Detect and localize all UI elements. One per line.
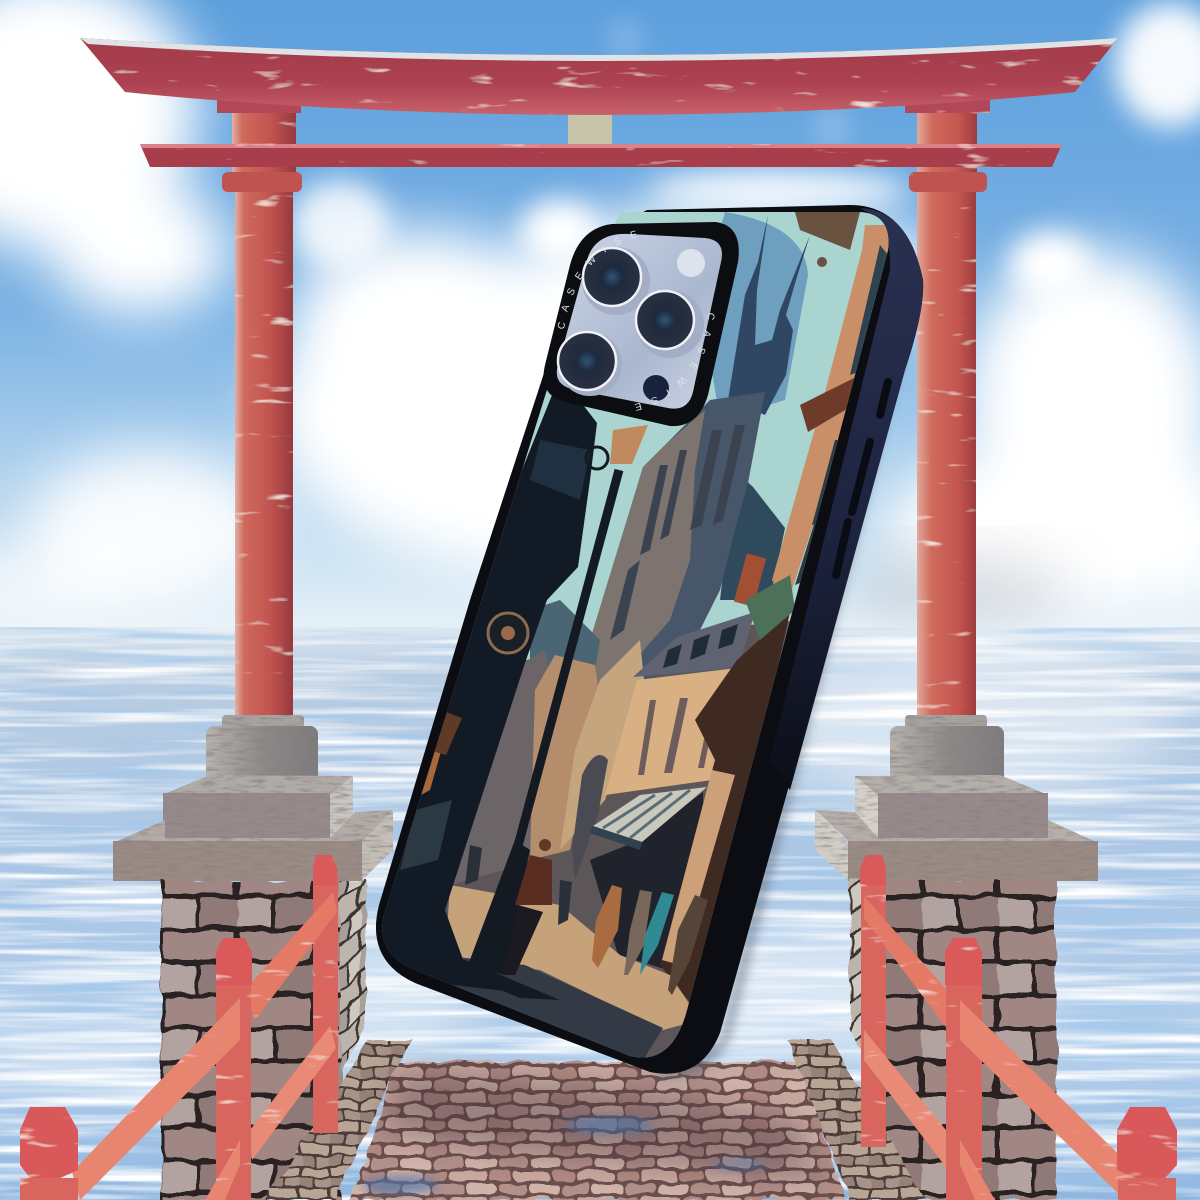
left brick pier	[161, 880, 366, 1200]
phone case	[376, 205, 924, 1074]
lens 1	[582, 247, 650, 315]
street lit	[445, 885, 700, 1030]
camera plate	[557, 234, 722, 409]
right terracotta building	[772, 225, 888, 590]
street shadow	[385, 945, 663, 1065]
side buttons	[836, 382, 888, 575]
cathedral lower front	[560, 640, 645, 850]
sky arc	[712, 212, 808, 404]
right stone base	[815, 715, 1098, 881]
lower scene backing	[380, 620, 800, 1070]
leaves	[795, 212, 860, 267]
phone motion blur	[650, 350, 905, 1078]
distant shaded houses	[454, 650, 548, 884]
cathedral arch windows	[610, 425, 745, 640]
stone walkway	[265, 1040, 925, 1200]
slate roof	[633, 612, 755, 677]
brand text: CASEWISE	[558, 230, 638, 329]
case body	[376, 205, 923, 1074]
lens 2	[636, 290, 704, 358]
camera plateau	[544, 222, 739, 426]
artwork: street scene	[370, 205, 900, 1075]
lamp post	[464, 425, 648, 1000]
mountain	[720, 470, 785, 600]
torii: left pillar	[217, 85, 302, 720]
right railing	[860, 855, 1177, 1200]
sky background	[0, 0, 1200, 630]
portal arch	[572, 755, 608, 880]
distant sand houses	[530, 655, 600, 860]
left railing	[20, 855, 338, 1200]
torii: top beam	[80, 38, 1118, 115]
torii: lower beam	[140, 144, 1062, 167]
sea	[0, 627, 1200, 1200]
cathedral lit facade	[590, 410, 705, 700]
sensor	[643, 375, 669, 401]
walker	[503, 839, 552, 975]
flash	[677, 249, 705, 277]
left stone base	[113, 715, 393, 881]
clock	[488, 613, 528, 653]
cathedral spires	[728, 215, 810, 415]
striped awning	[590, 787, 707, 850]
right brick pier	[850, 880, 1056, 1200]
foreground terracotta block	[660, 575, 795, 1015]
cathedral tower	[630, 392, 765, 679]
pedestrians	[465, 845, 708, 995]
blue mountain behind lamp	[530, 600, 600, 668]
navy side edge	[770, 208, 923, 790]
brand text: CASEWISE	[634, 313, 714, 411]
lens 3	[558, 332, 622, 396]
torii: centre strut	[568, 104, 612, 144]
tan side hall	[605, 668, 737, 795]
torii: right pillar	[905, 85, 990, 720]
clouds	[0, 0, 1200, 630]
awning shade	[590, 792, 704, 970]
left dark building	[370, 375, 597, 995]
